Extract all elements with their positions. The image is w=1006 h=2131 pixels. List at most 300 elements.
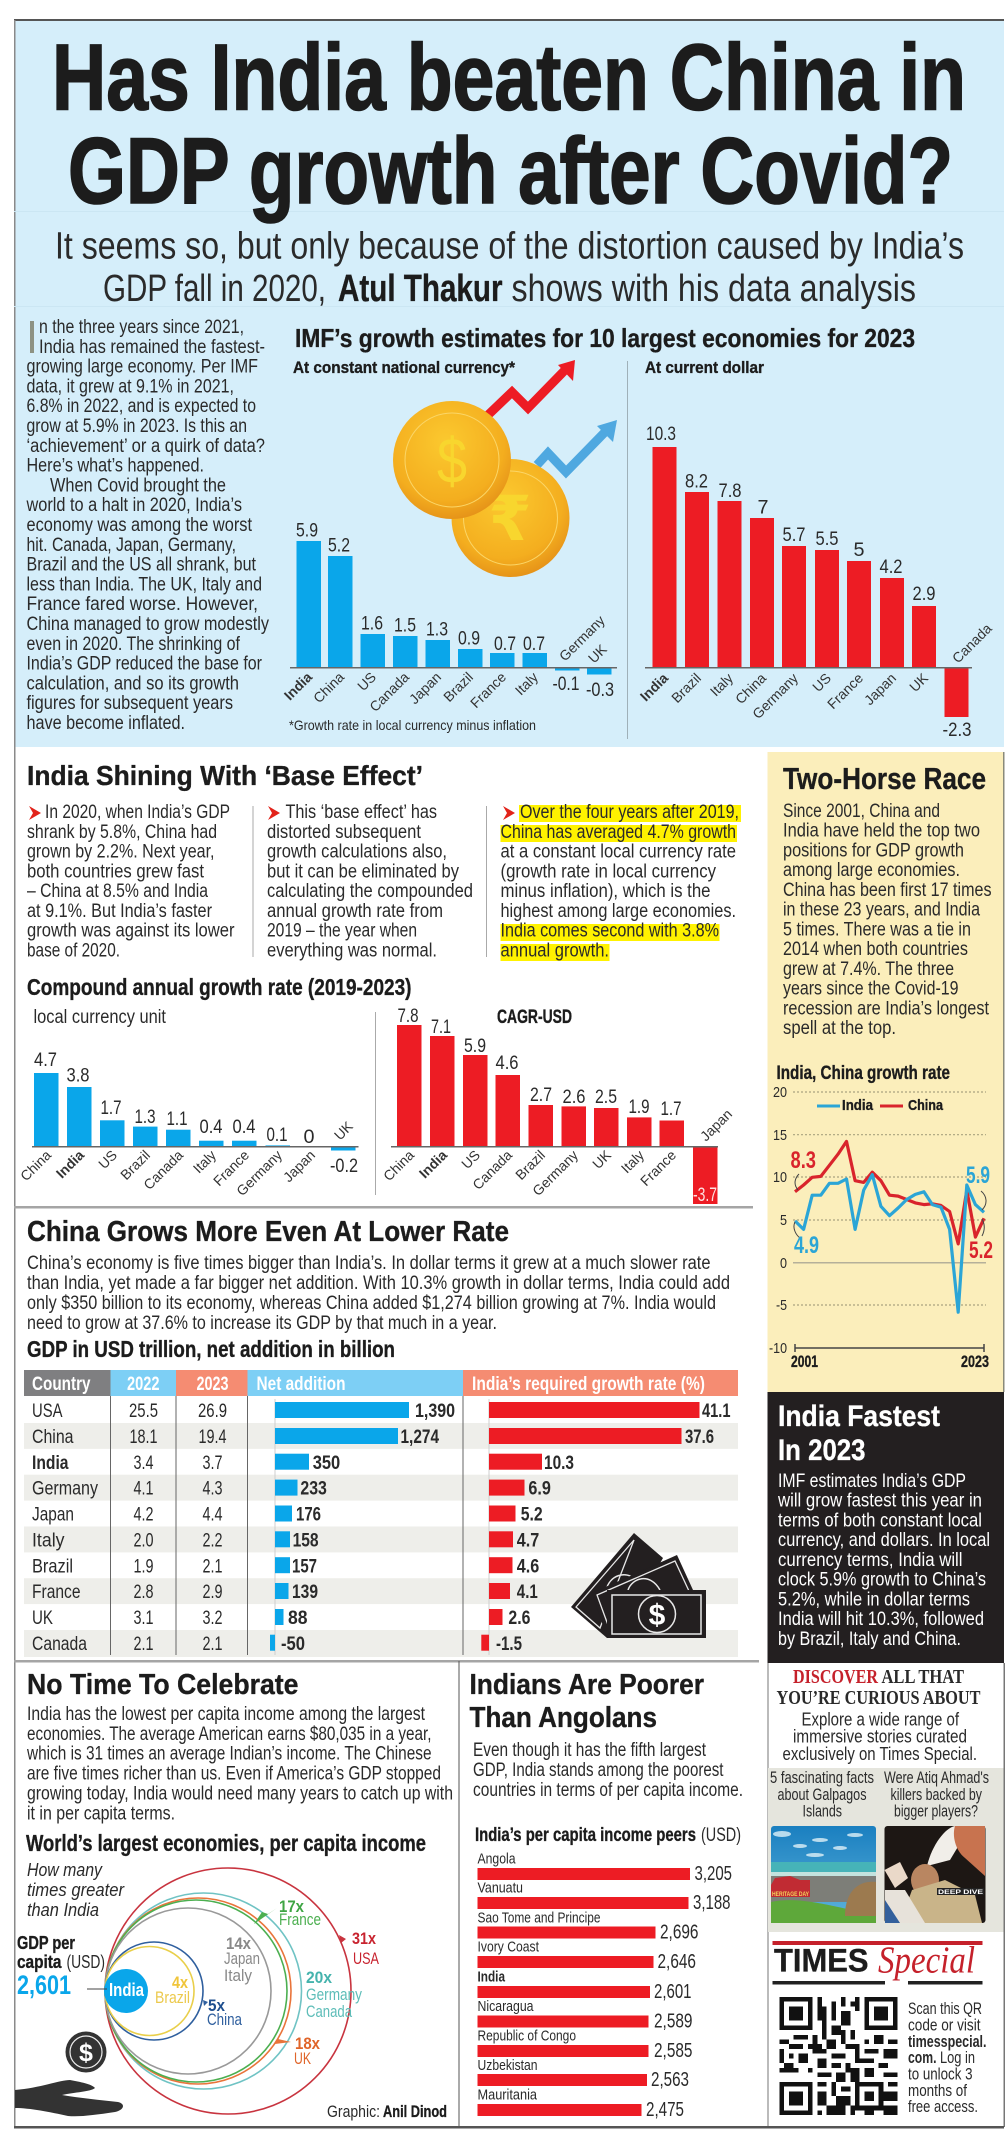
text column 2: This ‘base effect’ has — [286, 802, 437, 823]
2022 values: 18.1 — [130, 1427, 158, 1448]
intro text column: less than India. The UK, Italy and — [26, 574, 262, 596]
legend — [817, 1097, 944, 1114]
GDP per capita label: GDP per — [17, 1933, 75, 1953]
chart: CAGR USD: Canada — [469, 1147, 515, 1193]
intro text column: figures for subsequent years — [26, 693, 233, 714]
chart: CAGR local currency: 0.1 — [266, 1125, 288, 1146]
text: no time to celebrate: it in per capita terms. — [27, 1803, 175, 1824]
QR instructions: com. — [908, 2048, 936, 2067]
net addition values: 157 — [292, 1556, 317, 1577]
discover heading — [776, 1666, 981, 1709]
bar chart: per capita income peers: Nicaragua — [478, 1998, 534, 2015]
chart: constant national currency: 0.7 — [523, 634, 545, 655]
chart: current dollar: 10.3 — [646, 424, 676, 445]
icon: dollar coin — [66, 2032, 106, 2072]
chart: constant national currency: 0.7 — [494, 634, 516, 655]
label: 18x UK: UK — [294, 2049, 311, 2068]
label: 20x Germany Canada: Germany — [306, 1985, 362, 2004]
2023 values: 26.9 — [198, 1401, 227, 1422]
chart: CAGR local currency: 1.7 — [100, 1098, 122, 1119]
panel: India Fastest In 2023 — [768, 1392, 1004, 1663]
required growth values: 5.2 — [521, 1504, 543, 1526]
text column 1: In 2020, when India’s GDP — [45, 802, 230, 823]
chart: constant national currency: 1.5 — [394, 616, 416, 636]
chart: CAGR local currency: 4.7 — [34, 1050, 57, 1071]
2023 values: 2.2 — [202, 1530, 222, 1551]
label: 5x China — [203, 1996, 242, 2029]
chart: constant national currency: US — [354, 669, 379, 694]
required growth values: 4.1 — [517, 1582, 538, 1603]
label: 4x Brazil: Brazil — [155, 1988, 190, 2007]
country names: Italy — [32, 1530, 65, 1551]
text column 1: growth was against its lower — [27, 920, 235, 942]
text column 1: at 9.1%. But India’s faster — [27, 901, 213, 922]
text column 2: annual growth rate from — [267, 901, 443, 922]
required growth values: 41.1 — [702, 1401, 731, 1422]
label: 5x China: China — [207, 2010, 242, 2029]
country names: Germany — [32, 1479, 98, 1500]
table header: Net addition — [256, 1374, 346, 1395]
label: 4x Brazil — [155, 1973, 190, 2007]
required growth values: 10.3 — [544, 1453, 574, 1474]
nested circles chart — [17, 1860, 379, 2114]
GDP per capita label: (USD) — [66, 1952, 105, 1972]
text: two-horse race: grew at 7.4%. The three — [783, 959, 954, 980]
chart: CAGR local currency: -0.2 — [330, 1156, 358, 1177]
text column 1 — [27, 802, 235, 962]
discover text: immersive stories curated — [793, 1727, 967, 1747]
required growth values — [496, 1401, 731, 1655]
text: two-horse race: Since 2001, China and — [783, 801, 940, 822]
2022 values: 3.4 — [134, 1453, 154, 1474]
chart: constant national currency: Germany — [556, 612, 608, 664]
panel: Two-Horse Race — [768, 752, 1004, 1392]
chart: current dollar: Germany — [749, 670, 801, 722]
credit: Anil Dinod — [383, 2102, 447, 2121]
intro text column — [26, 317, 269, 734]
required growth values: 37.6 — [685, 1427, 714, 1448]
chart: current dollar: 4.2 — [880, 557, 902, 578]
2023 values — [198, 1401, 227, 1655]
chart: CAGR USD: India — [416, 1147, 450, 1181]
chart: constant national currency: Canada — [366, 669, 412, 715]
logo: Times Special — [772, 1940, 982, 1984]
panel: India Shining With Base Effect — [27, 760, 741, 962]
label: 4x Brazil: 4x — [172, 1973, 188, 1992]
line chart: India, China growth rate: 5 — [780, 1212, 787, 1229]
story: Atiq Ahmad caption — [884, 1768, 989, 1820]
chart: constant national currency: France — [467, 669, 509, 711]
country names: USA — [32, 1401, 63, 1422]
title — [52, 24, 966, 223]
bar chart: per capita income peers: India’s per capita income peers — [475, 1825, 696, 1846]
subtitle: shows with his data analysis — [512, 268, 916, 310]
required growth values: 4.7 — [517, 1530, 539, 1551]
image: Atiq Ahmad thumbnail: DEEP DIVE — [938, 1890, 983, 1896]
icon: banknotes: $ — [649, 1599, 666, 1632]
story band — [768, 1768, 1004, 1932]
label: 14x Japan Italy: Italy — [224, 1966, 252, 1985]
story: Galpagos caption: Islands — [802, 1802, 842, 1820]
chart: CAGR USD: CAGR-USD — [497, 1007, 572, 1028]
chart: constant national currency: UK — [585, 641, 610, 666]
chart: current dollar: India — [637, 670, 671, 704]
bar chart: per capita income peers: Angola — [478, 1850, 516, 1867]
chart: CAGR USD: 2.5 — [595, 1087, 617, 1108]
text: two-horse race: among large economies. — [783, 860, 960, 881]
chart: current dollar: Japan — [861, 670, 899, 708]
country names — [32, 1401, 98, 1655]
2022 values: 4.2 — [134, 1504, 154, 1526]
chart: CAGR USD: 7.8 — [398, 1006, 418, 1027]
chart: constant national currency: China — [310, 669, 347, 706]
text column 1: grown by 2.2%. Next year, — [27, 842, 214, 862]
net addition values: 176 — [296, 1504, 321, 1526]
chart: CAGR USD: Japan — [697, 1106, 735, 1144]
bar chart: per capita income peers: 2,475 — [646, 2099, 684, 2121]
question note: How many — [27, 1860, 103, 1880]
heading: indians are poorer — [470, 1669, 704, 1734]
text column 3 — [500, 802, 739, 962]
bar chart: per capita income peers: 3,188 — [693, 1892, 730, 1914]
chart: CAGR USD: 7.1 — [431, 1017, 451, 1038]
chart: current dollar: At current dollar — [645, 358, 764, 377]
2022 values: 1.9 — [134, 1556, 154, 1577]
2023 values: 4.4 — [202, 1504, 223, 1526]
intro text column: world to a halt in 2020, India’s — [26, 495, 242, 516]
chart: CAGR USD: US — [458, 1147, 483, 1172]
2022 values: 2.0 — [134, 1530, 154, 1551]
panel: Times Special promotion — [768, 1666, 1004, 2116]
country names: China — [32, 1427, 74, 1448]
GDP per capita label: 2,601 — [17, 1970, 71, 2000]
net addition values: 1,274 — [400, 1427, 439, 1448]
text column 3: India comes second with 3.8% — [500, 920, 719, 942]
chart: constant national currency: Brazil — [440, 669, 476, 705]
chart: current dollar: 7 — [758, 498, 768, 518]
text: no time to celebrate: which is 31 times an average Indian’s income. The Chinese — [26, 1744, 431, 1765]
text column 2 — [267, 802, 473, 962]
question note: times greater — [27, 1880, 125, 1900]
bar chart: per capita income peers: Vanuatu — [478, 1880, 523, 1897]
text: china grows more: need to grow at 37.6% to increase its GDP by that much in a year. — [27, 1313, 497, 1334]
chart: CAGR local currency: 1.3 — [134, 1107, 156, 1128]
text column 2: but it can be eliminated by — [267, 862, 459, 882]
story: Galpagos caption — [770, 1768, 874, 1820]
heading: compound annual growth rate: Compound annual growth rate (2019-2023) — [27, 974, 412, 1000]
India circle — [104, 1969, 148, 2013]
2022 values: 3.1 — [134, 1608, 154, 1629]
heading: indians are poorer: Indians Are Poorer — [470, 1669, 704, 1701]
label: 20x Germany Canada: 20x — [306, 1968, 332, 1987]
chart: constant national currency: India — [281, 669, 315, 703]
bar chart: per capita income peers: 2,585 — [654, 2040, 692, 2062]
chart: CAGR local currency: 0 — [304, 1127, 314, 1148]
bar chart: per capita income peers: 2,646 — [658, 1951, 696, 1973]
QR instructions: code or visit — [908, 2016, 981, 2034]
chart: CAGR local currency: UK — [331, 1118, 356, 1143]
bar chart: per capita income peers — [475, 1825, 741, 2121]
intro text column: Here’s what’s happened. — [26, 456, 204, 476]
subtitle — [55, 226, 964, 310]
text: two-horse race: positions for GDP growth — [783, 840, 964, 862]
chart: CAGR local currency — [17, 1007, 359, 1199]
label: 31x USA: 31x — [352, 1929, 376, 1948]
chart: constant national currency: Italy — [512, 669, 541, 698]
text column 3: at a constant local currency rate — [500, 842, 736, 862]
subtitle: GDP fall in 2020, — [103, 268, 326, 310]
net addition values: 1,390 — [415, 1401, 455, 1422]
line chart: India, China growth rate — [769, 1063, 993, 1371]
label: 31x USA — [339, 1929, 379, 1968]
table header: Country — [32, 1374, 91, 1395]
bar chart: per capita income peers: (USD) — [701, 1825, 741, 1846]
text column 3: (growth rate in local currency — [500, 862, 716, 882]
net addition values — [281, 1401, 455, 1655]
icon: dollar coin: $ — [79, 2039, 93, 2067]
intro text column: Brazil and the US all shrank, but — [26, 554, 257, 576]
net addition bars — [270, 1402, 409, 1651]
question note: than India — [27, 1900, 99, 1920]
label: 14x Japan Italy: Japan — [224, 1949, 260, 1968]
chart: current dollar: Canada — [949, 620, 995, 666]
intro text column: 6.8% in 2022, and is expected to — [26, 396, 256, 417]
2022 values: 4.1 — [134, 1479, 154, 1500]
bar chart: per capita income peers: 2,563 — [651, 2069, 689, 2091]
chart: CAGR USD: France — [637, 1147, 679, 1189]
2022 values — [129, 1401, 158, 1655]
label: 14x Japan Italy — [224, 1934, 260, 1985]
text column 2: growth calculations also, — [267, 842, 447, 862]
QR instructions: free access. — [908, 2097, 978, 2116]
question note — [27, 1860, 125, 1920]
table header: 2023 — [196, 1374, 228, 1395]
text: indians are poorer: Even though it has the fifth largest — [473, 1740, 707, 1761]
illustration: coins with growth arrows: ₹ — [488, 482, 532, 555]
label: 18x UK: 18x — [295, 2034, 320, 2053]
bar chart: per capita income peers: Republic of Congo — [478, 2028, 576, 2045]
story: Galpagos caption: 5 fascinating facts — [770, 1768, 874, 1787]
illustration: coins with growth arrows — [393, 360, 617, 577]
line chart: India, China growth rate: India, China growth rate — [776, 1063, 950, 1084]
QR instructions: Log in — [940, 2048, 975, 2067]
text: two-horse race: 2014 when both countries — [783, 939, 968, 960]
text: china grows more — [27, 1253, 730, 1334]
text: indians are poorer: countries in terms of per capita income. — [473, 1780, 743, 1801]
chart: CAGR local currency: Brazil — [117, 1147, 153, 1183]
required growth values: -1.5 — [496, 1634, 522, 1655]
intro text column: India has remained the fastest- — [39, 337, 265, 358]
label: 17x France — [254, 1897, 321, 1929]
chart: CAGR local currency: local currency unit — [34, 1007, 167, 1028]
chart: CAGR USD: Italy — [618, 1147, 647, 1176]
icon: hand — [15, 2080, 123, 2116]
2023 values: 3.7 — [202, 1453, 222, 1474]
image: Galapagos thumbnail — [771, 1826, 876, 1923]
text column 1: – China at 8.5% and India — [27, 881, 208, 902]
text: india fastest: will grow fastest this year in — [777, 1491, 982, 1512]
chart: CAGR local currency: India — [53, 1147, 87, 1181]
bar chart: per capita income peers: India — [478, 1968, 506, 1985]
country names: UK — [32, 1608, 53, 1629]
chart: constant national currency: 1.6 — [361, 614, 383, 634]
discover heading: DISCOVER — [793, 1666, 878, 1688]
chart: constant national currency: Japan — [406, 669, 444, 707]
chart: constant national currency: *Growth rate in local currency minus inflation — [289, 717, 536, 733]
line chart: India, China growth rate: 8.3 — [790, 1147, 816, 1174]
chart: current dollar: US — [809, 670, 834, 695]
illustration: coins with growth arrows: $ — [437, 425, 467, 497]
label: 14x Japan Italy: 14x — [226, 1934, 251, 1953]
chart: current dollar: China — [732, 670, 769, 707]
heading: no time to celebrate: No Time To Celebrate — [27, 1669, 298, 1701]
chart: CAGR USD: 5.9 — [464, 1036, 486, 1057]
table header — [24, 1370, 738, 1396]
chart: CAGR local currency: Canada — [140, 1147, 186, 1193]
chart: CAGR local currency: Italy — [190, 1147, 219, 1176]
text: indians are poorer — [473, 1740, 743, 1801]
net addition values: 158 — [293, 1530, 319, 1551]
label: 18x UK — [275, 2034, 320, 2068]
text column 1: shrank by 5.8%, China had — [27, 822, 217, 843]
QR instructions: months of — [908, 2081, 967, 2100]
bar chart: per capita income peers: 2,601 — [654, 1981, 692, 2003]
logo: Times Special: TIMES — [774, 1942, 868, 1978]
text: no time to celebrate: economies. The average American earns $80,035 in a year, — [27, 1724, 432, 1745]
discover heading: ALL THAT — [882, 1666, 965, 1688]
text: india fastest: currency terms, India will — [778, 1550, 962, 1571]
text: indians are poorer: GDP, India stands among the poorest — [473, 1760, 724, 1781]
chart: CAGR local currency: 1.1 — [166, 1109, 188, 1130]
logo: Times Special: Special — [878, 1940, 975, 1982]
chart: current dollar: Brazil — [668, 670, 704, 706]
intro text column: When Covid brought the — [50, 476, 226, 496]
line chart: India, China growth rate: 5.2 — [969, 1237, 993, 1264]
text column 1: both countries grew fast — [27, 862, 205, 882]
QR instructions — [908, 1999, 986, 2116]
chart: current dollar: Italy — [707, 670, 736, 699]
intro text column: calculation, and so its growth — [26, 674, 239, 694]
line chart: India, China growth rate: 2023 — [961, 1352, 989, 1371]
intro text column: data, it grew at 9.1% in 2021, — [26, 376, 234, 398]
panel: No Time To Celebrate — [15, 1669, 453, 2121]
discover text — [782, 1710, 977, 1764]
chart: CAGR USD: -3.7 — [693, 1185, 717, 1206]
intro text column: China managed to grow modestly — [26, 614, 269, 635]
text column 1: base of 2020. — [27, 940, 120, 962]
legend: India — [842, 1097, 874, 1114]
text column 2: distorted subsequent — [267, 822, 422, 843]
text column 3: minus inflation), which is the — [500, 881, 710, 902]
chart: constant national currency: 1.3 — [426, 620, 448, 640]
text: two-horse race — [783, 801, 992, 1039]
intro text column: have become inflated. — [26, 713, 185, 734]
country names: India — [32, 1453, 69, 1474]
chart: CAGR USD — [380, 1006, 735, 1206]
chart: CAGR USD: Brazil — [512, 1147, 548, 1183]
2023 values: 2.9 — [202, 1582, 222, 1603]
text: india fastest: 5.2%, while in dollar terms — [778, 1590, 970, 1610]
2023 values: 2.1 — [202, 1556, 222, 1577]
image: Galapagos thumbnail: HERITAGE DAY — [772, 1892, 809, 1898]
chart: CAGR local currency: Japan — [280, 1147, 318, 1185]
net addition values: 233 — [300, 1479, 327, 1500]
chart: CAGR local currency: Germany — [233, 1147, 285, 1199]
chart: current dollar: 5.5 — [816, 529, 838, 550]
text: china grows more: than India, yet made a far bigger net addition. With 10.3% growth in dollar terms, India could add — [27, 1273, 730, 1294]
discover text: Explore a wide range of — [802, 1710, 960, 1730]
credit: Graphic: — [327, 2102, 380, 2121]
line chart: India, China growth rate: 5.9 — [966, 1162, 990, 1189]
line chart: India, China growth rate: 0 — [780, 1255, 787, 1272]
QR instructions: to unlock 3 — [908, 2064, 972, 2084]
heading: IMF estimates: IMF’s growth estimates for 10 largest economies for 2023 — [295, 323, 915, 353]
header panel background — [14, 20, 1004, 747]
text: india fastest — [777, 1471, 990, 1650]
heading: india fastest: India Fastest — [778, 1400, 940, 1433]
country names: Brazil — [32, 1556, 73, 1577]
intro text column: hit. Canada, Japan, Germany, — [26, 535, 236, 556]
chart: CAGR local currency: 0.4 — [200, 1117, 223, 1138]
country names: France — [32, 1582, 80, 1603]
highlights — [500, 805, 741, 961]
chart: constant national currency: -0.3 — [586, 680, 614, 701]
text: india fastest: by Brazil, Italy and China. — [778, 1629, 961, 1650]
India circle: India — [109, 1980, 145, 2000]
icon: banknotes — [571, 1533, 706, 1638]
net addition values: 88 — [288, 1608, 308, 1629]
required growth bars — [481, 1402, 700, 1651]
text: no time to celebrate: are five times richer than us. Even if America’s GDP stopped — [27, 1764, 441, 1784]
intro text column: France fared worse. However, — [26, 594, 258, 615]
chart: CAGR USD: Germany — [529, 1147, 581, 1199]
required growth values: 6.9 — [528, 1479, 551, 1500]
label: 5x China: 5x — [208, 1996, 225, 2015]
chart: current dollar: 7.8 — [718, 481, 742, 502]
text column 3: annual growth. — [500, 940, 609, 962]
chart: current dollar: -2.3 — [942, 720, 972, 741]
chart: CAGR local currency: China — [17, 1147, 54, 1184]
2022 values: 2.1 — [134, 1634, 154, 1655]
chart: current dollar: 8.2 — [685, 472, 708, 492]
legend: China — [908, 1097, 944, 1114]
bar chart: per capita income peers: 2,696 — [660, 1922, 698, 1944]
bar chart: per capita income peers: 2,589 — [654, 2010, 692, 2032]
chart: current dollar: UK — [906, 669, 932, 695]
chart: current dollar: France — [824, 670, 866, 712]
text column 3: highest among large economies. — [500, 901, 736, 922]
line chart: India, China growth rate: -10 — [769, 1340, 787, 1357]
chart: constant national currency: 0.9 — [458, 628, 480, 650]
line chart: India, China growth rate: 4.9 — [794, 1232, 819, 1259]
label: 17x France: 17x — [279, 1897, 304, 1916]
table: GDP in USD trillion — [24, 1370, 738, 1657]
intro text column: India’s GDP reduced the base for — [26, 654, 263, 674]
text: india fastest: terms of both constant local — [778, 1510, 982, 1532]
text: no time to celebrate: India has the lowest per capita income among the largest — [27, 1704, 426, 1725]
label: 17x France: France — [279, 1910, 321, 1929]
chart: constant national currency: At constant national currency* — [293, 358, 515, 377]
panel: China Grows More — [24, 1216, 738, 1657]
text: two-horse race: years since the Covid-19 — [783, 979, 958, 1000]
text column 3: China has averaged 4.7% growth — [500, 822, 736, 843]
net addition values: -50 — [281, 1634, 305, 1655]
line chart: India, China growth rate: 2001 — [791, 1352, 818, 1371]
QR instructions: Scan this QR — [908, 1999, 982, 2018]
chart: CAGR local currency: 0.4 — [232, 1117, 256, 1138]
text: two-horse race: spell at the top. — [783, 1018, 896, 1039]
text: china grows more: only $350 billion to its economy, whereas China added $1,274 billion growing at 7%. India would — [27, 1293, 716, 1314]
